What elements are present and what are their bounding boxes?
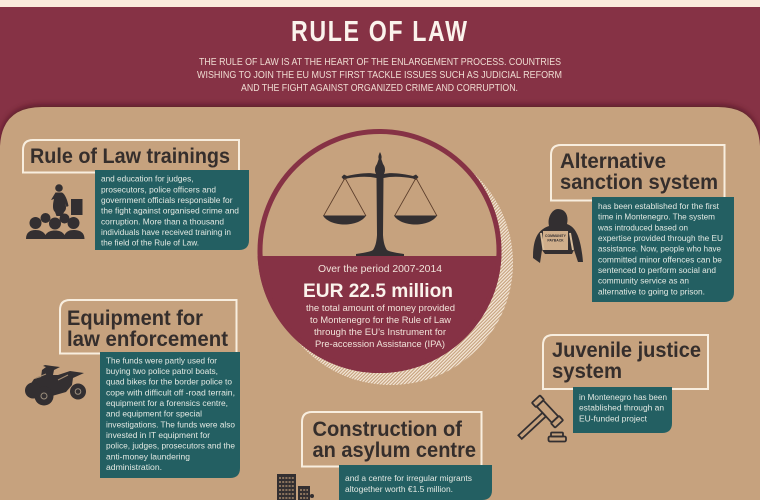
circle text: through the EU’s Instrument for: [314, 326, 446, 337]
text box: EU-funded project: [579, 413, 648, 423]
icon: buildings: [277, 474, 314, 500]
panel: rule of law trainings: [23, 140, 249, 250]
circle fill top: [258, 129, 502, 373]
intro text: WISHING TO JOIN THE EU MUST FIRST TACKLE ISSUES SUCH AS JUDICIAL REFORM: [197, 70, 562, 81]
heading box: [551, 145, 724, 200]
text box: invested in IT equipment for: [106, 430, 210, 440]
heading box: [302, 412, 482, 466]
text box: cope with difficult off -road terrain,: [106, 387, 235, 397]
panel: alternative sanction system: [533, 145, 734, 302]
circle text: the total amount of money provided: [306, 302, 455, 313]
heading box: [23, 140, 239, 172]
text box: in Montenegro has been: [579, 392, 667, 402]
hatched circle shadow: [269, 141, 513, 385]
text box: government officials responsible for: [101, 195, 233, 205]
heading box: [60, 300, 236, 354]
text box: and education for judges,: [101, 174, 194, 184]
icon: gavel: [508, 395, 566, 450]
icon: training audience: [26, 184, 84, 239]
circle text: Pre-accession Assistance (IPA): [315, 338, 445, 349]
intro text: AND THE FIGHT AGAINST ORGANIZED CRIME AND CORRUPTION.: [241, 83, 518, 94]
heading box: law enforcement: [67, 327, 228, 351]
circle text: EUR 22.5 million: [303, 280, 453, 302]
heading box: Equipment for: [67, 306, 204, 330]
circle text: [303, 264, 455, 349]
text box: was introduced based on: [597, 222, 688, 232]
circle lower maroon: [258, 256, 501, 373]
text box: and a centre for irregular migrants: [345, 473, 472, 483]
icon: community payback worker: COMMUNITY: [545, 234, 567, 238]
icon: community payback worker: PAYBACK: [547, 238, 564, 242]
panel shadow: [0, 105, 760, 198]
text box: established through an: [579, 403, 664, 413]
text box: The funds were partly used for: [106, 355, 217, 365]
central circle: [258, 129, 513, 385]
text box: [339, 465, 492, 500]
text box: time in Montenegro. The system: [598, 212, 715, 222]
text box: quad bikes for the border police to: [106, 377, 232, 387]
text box: expertise provided through the EU: [598, 233, 723, 243]
text box: buying two police patrol boats,: [106, 366, 218, 376]
text box: [573, 387, 672, 433]
top cream strip: [0, 0, 760, 8]
maroon header band: [0, 7, 760, 167]
text box: investigations. The funds were also: [106, 419, 235, 429]
text box: [95, 170, 249, 250]
text box: [592, 197, 734, 302]
title: RULE OF LAW: [291, 14, 467, 48]
heading box: Alternative: [560, 149, 666, 173]
heading box: sanction system: [560, 170, 718, 194]
panel: equipment for law enforcement: [25, 300, 240, 478]
text box: has been established for the first: [598, 201, 720, 211]
panel: construction of an asylum centre: [277, 412, 492, 500]
text box: [100, 352, 240, 478]
text box: the field of the Rule of Law.: [101, 238, 199, 248]
icon: scales of justice: [323, 152, 437, 256]
circle text: Over the period 2007-2014: [318, 264, 442, 275]
text box: individuals have received training in: [101, 227, 231, 237]
text box: altogether worth €1.5 million.: [345, 484, 453, 494]
text box: police, judges, prosecutors and the: [106, 441, 235, 451]
text box: sentenced to perform social and: [598, 265, 716, 275]
text box: committed minor offences can be: [598, 254, 722, 264]
heading box: an asylum centre: [312, 438, 476, 462]
tan main panel: [0, 107, 760, 500]
text box: corruption. More than a thousand: [101, 216, 224, 226]
text box: equipment for a forensics centre,: [106, 398, 228, 408]
text box: administration.: [106, 462, 162, 472]
heading box: system: [552, 359, 622, 383]
text box: alternative to going to prison.: [598, 286, 705, 296]
heading box: Rule of Law trainings: [30, 144, 230, 168]
panel: juvenile justice system: [508, 335, 708, 450]
intro text: THE RULE OF LAW IS AT THE HEART OF THE ENLARGEMENT PROCESS. COUNTRIES: [199, 57, 561, 68]
heading box: [543, 335, 708, 389]
text box: community service as an: [598, 276, 689, 286]
circle text: to Montenegro for the Rule of Law: [310, 314, 451, 325]
text box: anti-money laundering: [106, 451, 190, 461]
heading box: Construction of: [312, 417, 463, 441]
intro text: [197, 57, 562, 94]
icon: community payback worker: [533, 209, 583, 263]
text box: and equipment for special: [106, 409, 202, 419]
heading box: Juvenile justice: [552, 338, 701, 362]
circle ring: [260, 132, 499, 370]
text box: the fight against organised crime and: [101, 206, 239, 216]
text box: prosecutors, police officers and: [101, 184, 216, 194]
icon: quad bike: [25, 365, 86, 406]
text box: assistance. Now, people who have: [598, 244, 721, 254]
